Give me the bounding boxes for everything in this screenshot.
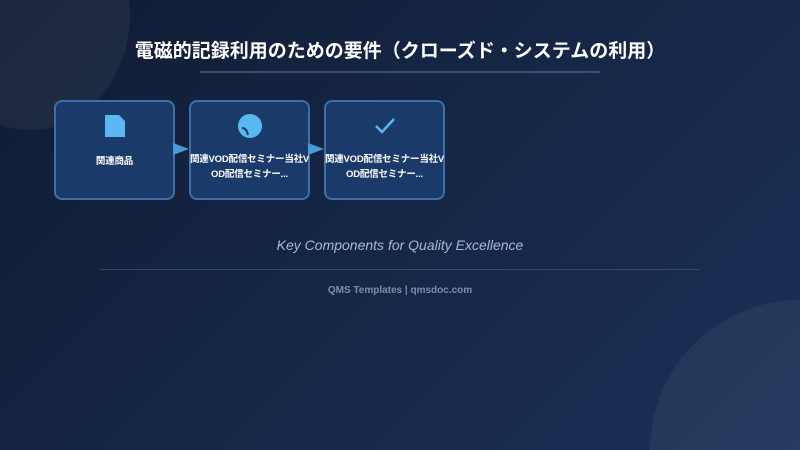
card 3: 関連VOD配信セミナー当社V (325, 154, 444, 165)
card: 関連商品: 関連商品 (96, 156, 133, 167)
card: 関連商品 (54, 100, 175, 200)
icon: globe (238, 114, 262, 138)
card 2: OD配信セミナー... (211, 169, 288, 180)
card 3: OD配信セミナー... (346, 169, 423, 180)
icon: check (375, 118, 395, 134)
arrow 2 (308, 143, 324, 155)
title: 電磁的記録利用のための要件（クローズド・システムの利用） (135, 41, 665, 62)
card 2 (189, 100, 310, 200)
footer: QMS Templates | qmsdoc.com (328, 285, 472, 296)
card 2: 関連VOD配信セミナー当社V (190, 154, 309, 165)
card 3 (324, 100, 445, 200)
icon: document (105, 115, 125, 137)
subtitle: Key Components for Quality Excellence (277, 237, 523, 253)
arrow 1 (173, 143, 189, 155)
